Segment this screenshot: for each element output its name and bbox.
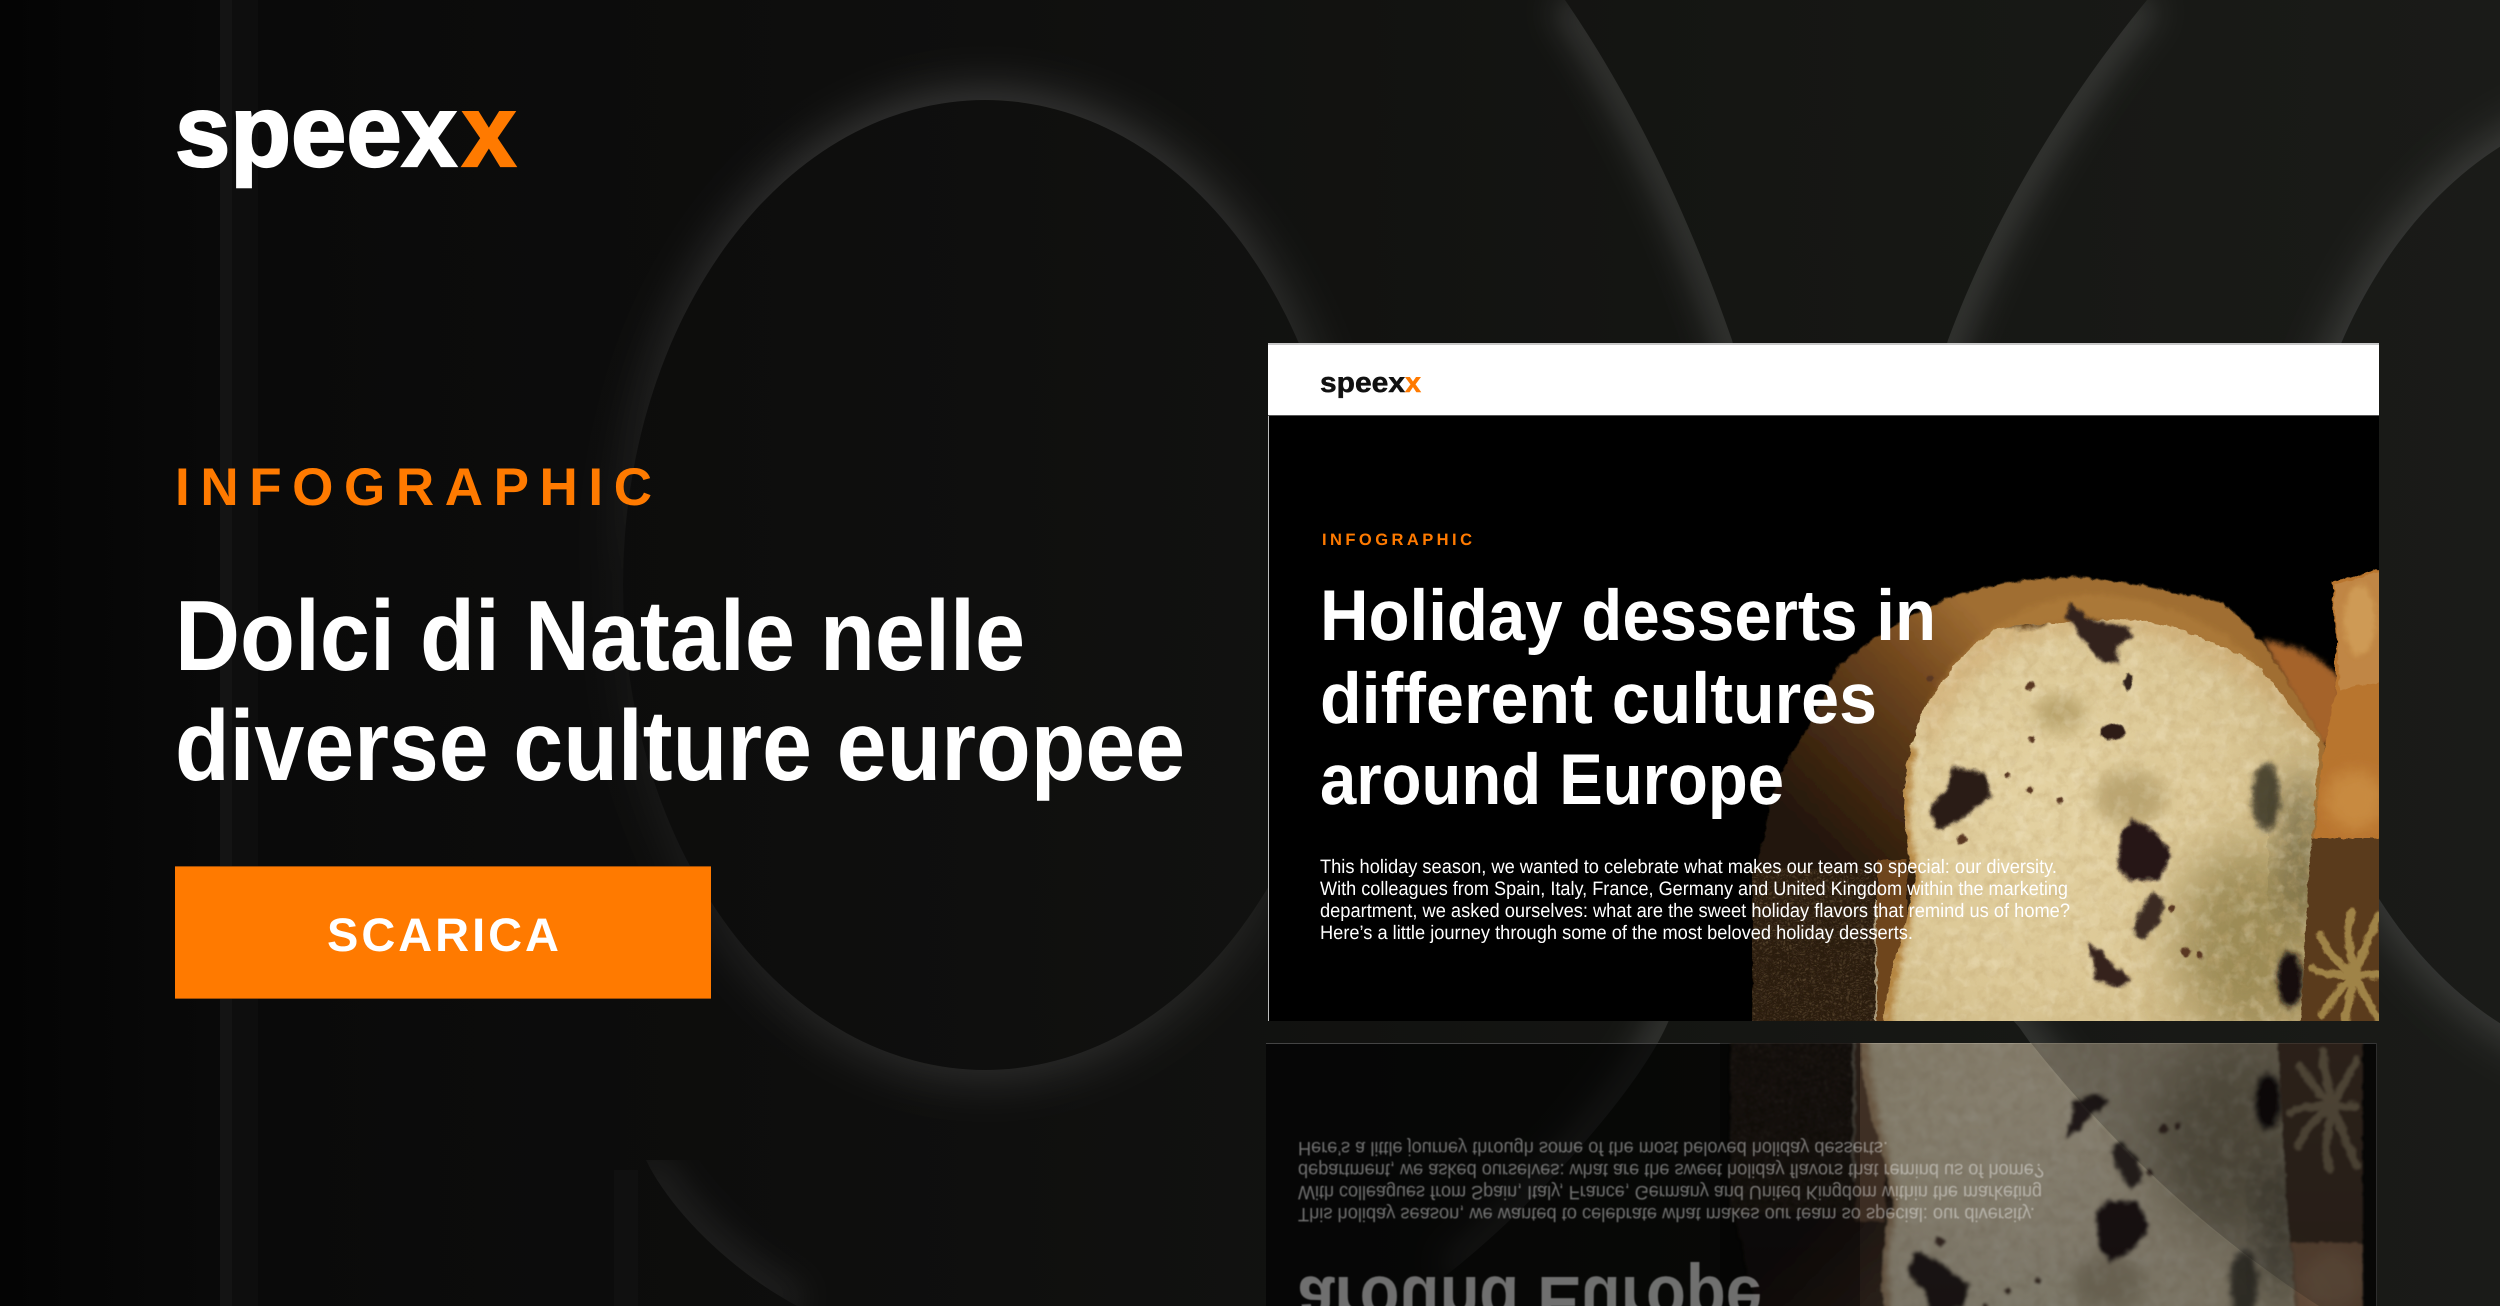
card title: around Europe — [1320, 740, 1784, 820]
card description: Here’s a little journey through some of the most beloved holiday desserts. — [1320, 922, 1913, 944]
button: SCARICA — [175, 866, 711, 999]
card description: With colleagues from Spain, Italy, France, Germany and United Kingdom within the marketing — [1320, 878, 2068, 900]
panel: infographic preview card — [1268, 343, 2385, 1045]
reflected text: With colleagues from Spain, Italy, France, Germany and United Kingdom within the marketing — [1298, 1181, 2042, 1203]
reflection of preview card — [1266, 1043, 2377, 1306]
card header — [1268, 343, 2379, 416]
reflected text: Here’s a little journey through some of the most beloved holiday desserts. — [1298, 1137, 1888, 1159]
photo: panettone — [1752, 568, 2385, 1045]
card description: department, we asked ourselves: what are the sweet holiday flavors that remind us of home? — [1320, 900, 2070, 922]
main heading: Dolci di Natale nelle — [175, 580, 1025, 692]
card header: x — [1405, 367, 1421, 398]
card eyebrow: INFOGRAPHIC — [1322, 531, 1472, 549]
reflected text: This holiday season, we wanted to celebrate what makes our team so special: our diversity. — [1298, 1203, 2035, 1225]
card description — [1320, 856, 2070, 944]
reflected text — [1298, 1137, 2044, 1306]
reflected text: department, we asked ourselves: what are the sweet holiday flavors that remind us of home? — [1298, 1159, 2044, 1181]
card header: speex — [1320, 367, 1405, 398]
card title — [1320, 576, 1936, 820]
button: SCARICA: SCARICA — [327, 908, 559, 961]
logo: speexx: speex — [175, 74, 457, 188]
card title: different cultures — [1320, 659, 1877, 739]
card title: Holiday desserts in — [1320, 576, 1936, 656]
main heading: diverse culture europee — [175, 690, 1185, 802]
eyebrow: INFOGRAPHIC: INFOGRAPHIC — [175, 458, 652, 517]
logo: speexx: x — [462, 74, 516, 188]
card description: This holiday season, we wanted to celebrate what makes our team so special: our diversity. — [1320, 856, 2057, 878]
main heading — [175, 580, 1185, 802]
